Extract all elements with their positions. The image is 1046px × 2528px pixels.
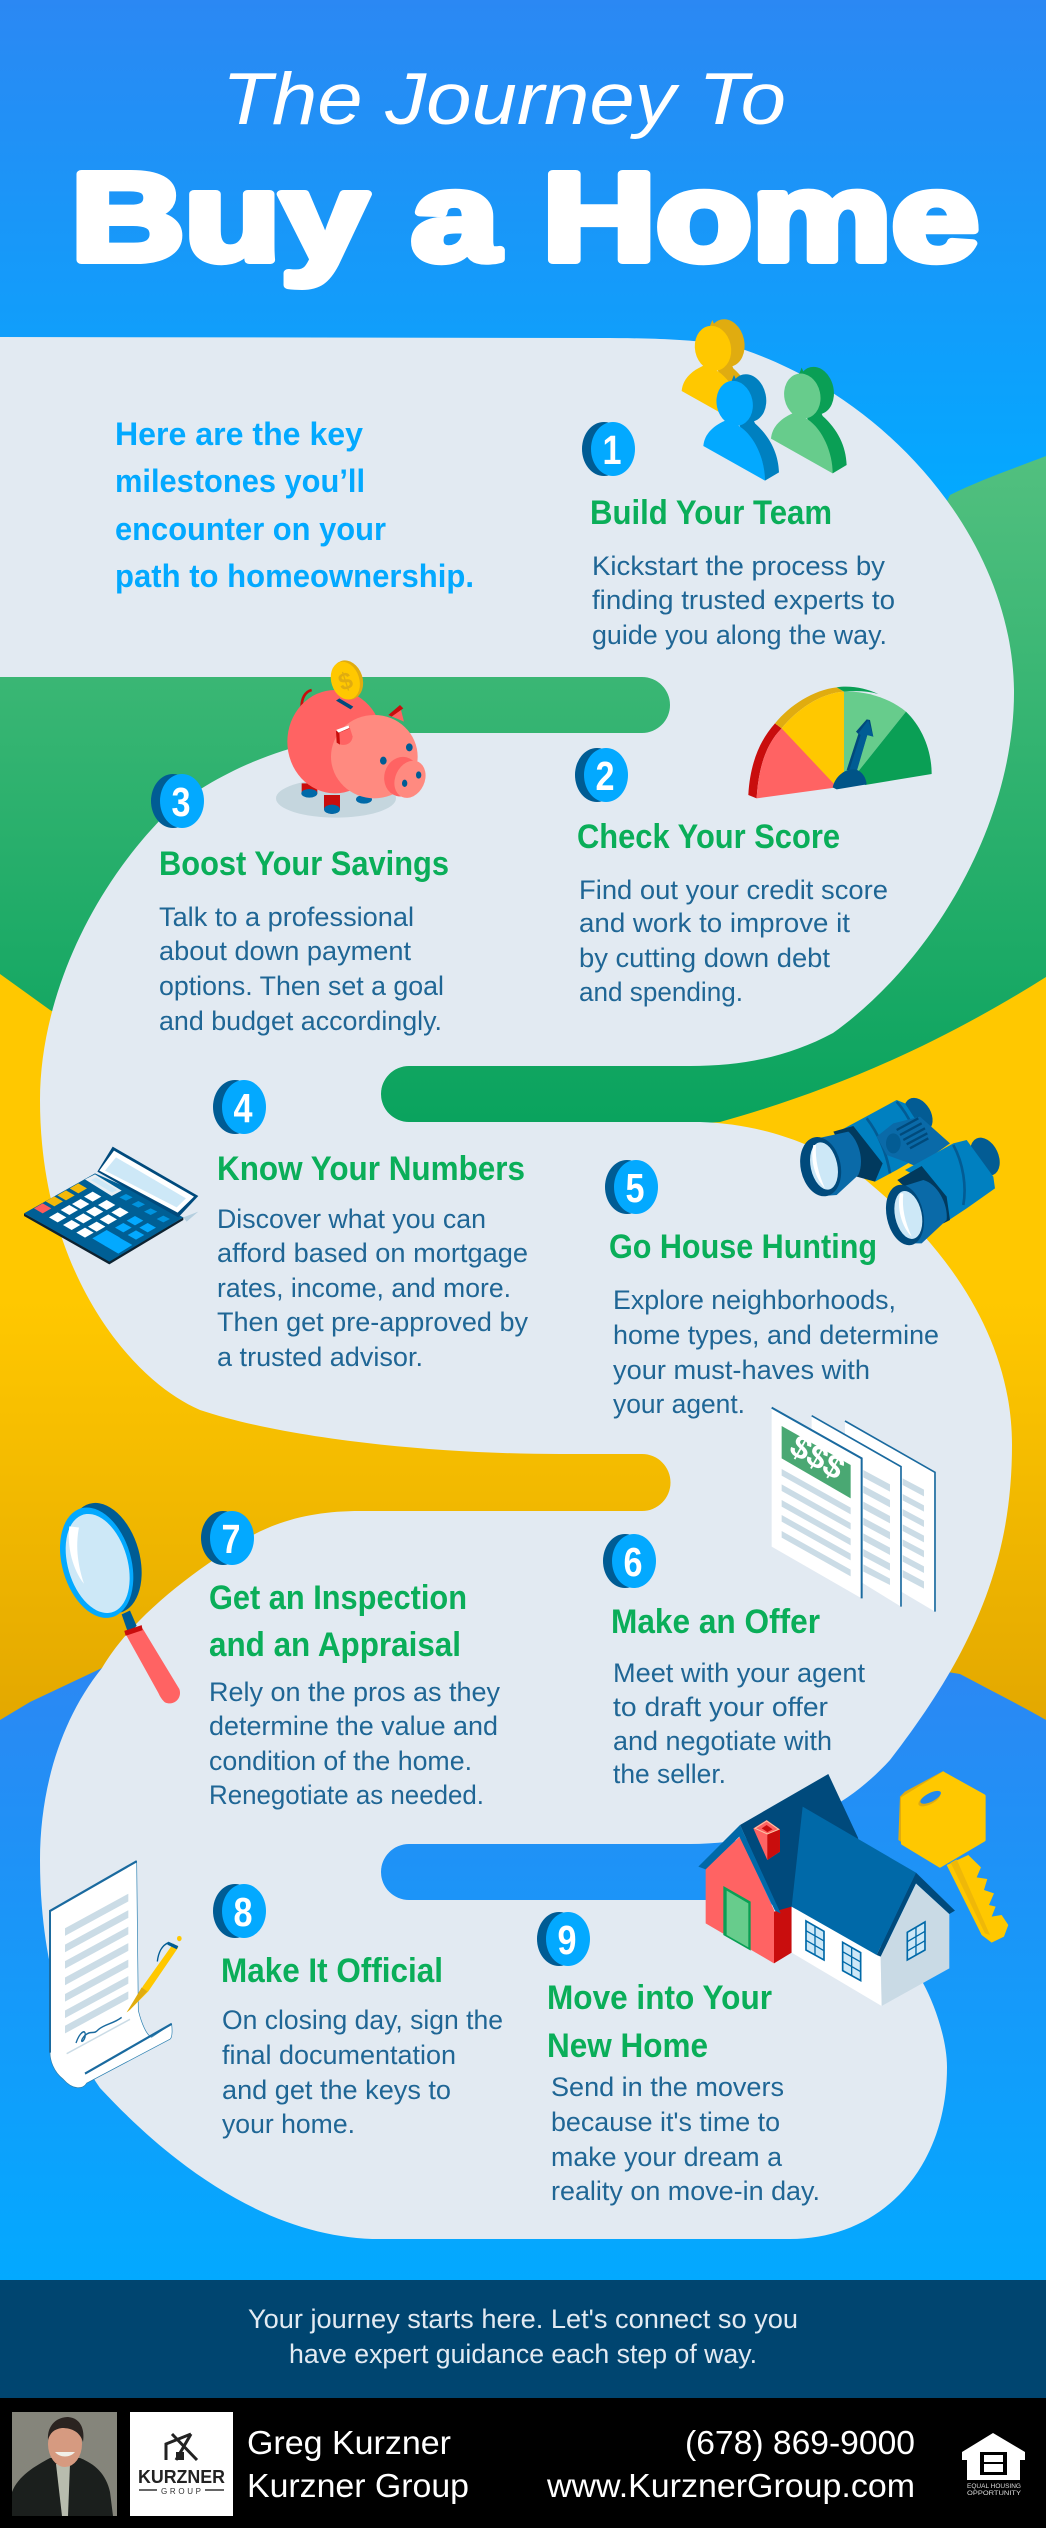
call to action band: Your journey starts here. Let's connect so you (248, 2304, 798, 2334)
heading 8: Make It Official (221, 1952, 443, 1990)
call to action band: have expert guidance each step of way. (289, 2339, 757, 2369)
body 9: Send in the movers (551, 2072, 784, 2102)
badge 7 (201, 1511, 254, 1565)
body 3: about down payment (159, 936, 411, 966)
step 9: move into your new home (537, 1912, 820, 2206)
icon: team of people (682, 316, 847, 481)
body 5: Explore neighborhoods, (613, 1285, 896, 1315)
company logo: KURZNER (138, 2467, 225, 2487)
icon: calculator (24, 1147, 198, 1264)
badge 8: 8 (234, 1889, 252, 1935)
background: yellow band (0, 974, 1046, 1800)
body 7 (209, 1677, 500, 1810)
body 4 (217, 1204, 528, 1372)
step 1: build your team (582, 422, 895, 650)
step 2: check your score (575, 748, 888, 1007)
agent photo (12, 2412, 117, 2516)
heading 9: New Home (547, 2027, 708, 2065)
background: lower blue band (0, 1600, 1046, 2282)
agent name: Greg Kurzner (247, 2424, 451, 2461)
icon: equal housing opportunity: EQUAL HOUSING (967, 2483, 1021, 2490)
body 8: and get the keys to (222, 2075, 451, 2105)
body 3: and budget accordingly. (159, 1006, 442, 1036)
body 5: your must-haves with (613, 1355, 870, 1385)
body 8 (222, 2005, 503, 2139)
call to action band (0, 2280, 1046, 2399)
badge 2: 2 (596, 753, 614, 799)
body 6: the seller. (613, 1759, 726, 1789)
step 4: know your numbers (213, 1080, 528, 1372)
heading 3: Boost Your Savings (159, 845, 449, 883)
house (698, 1774, 955, 2006)
phone and website: (678) 869-9000 (685, 2424, 915, 2461)
badge 3 (151, 774, 204, 828)
body 9: reality on move-in day. (551, 2176, 820, 2206)
step 7: get an inspection and an appraisal (201, 1511, 500, 1810)
body 6: to draft your offer (613, 1692, 828, 1722)
heading 7 (209, 1579, 467, 1664)
icon: piggy bank (276, 656, 431, 818)
icon: credit score gauge (748, 687, 932, 798)
heading 1: Build Your Team (590, 494, 832, 532)
body 2: and work to improve it (579, 908, 851, 938)
step 6: make an offer (603, 1534, 865, 1789)
icon: equal housing opportunity: OPPORTUNITY (967, 2490, 1022, 2497)
heading 6: Make an Offer (611, 1603, 820, 1641)
body 9 (551, 2072, 820, 2206)
badge 3: 3 (172, 779, 190, 825)
body 9: because it's time to (551, 2107, 780, 2137)
icon: magnifying glass (46, 1490, 180, 1703)
body 2: by cutting down debt (579, 943, 831, 973)
heading 2: Check Your Score (577, 818, 840, 856)
badge 9 (537, 1912, 590, 1966)
body 6 (613, 1658, 865, 1789)
key (898, 1771, 1008, 1943)
badge 9: 9 (558, 1917, 576, 1963)
body 6: and negotiate with (613, 1726, 832, 1756)
body 2: and spending. (579, 977, 743, 1007)
phone and website: www.KurznerGroup.com (546, 2467, 915, 2504)
body 6: Meet with your agent (613, 1658, 865, 1688)
body 1: finding trusted experts to (592, 585, 895, 615)
body 8: On closing day, sign the (222, 2005, 503, 2035)
background: top blue band (0, 0, 1046, 1000)
body 5: your agent. (613, 1389, 745, 1419)
title (71, 59, 979, 287)
badge 5: 5 (626, 1165, 644, 1211)
badge 1 (582, 422, 635, 476)
icon: binoculars (795, 1093, 1006, 1249)
body 3 (159, 902, 444, 1036)
body 2 (579, 875, 888, 1007)
heading 4: Know Your Numbers (217, 1150, 525, 1188)
body 7: determine the value and (209, 1711, 498, 1741)
icon: offer documents (772, 1408, 935, 1612)
title: The Journey To (222, 59, 786, 140)
body 4: afford based on mortgage (217, 1238, 528, 1268)
icon: offer documents: $$$ (784, 1427, 851, 1487)
body 7: condition of the home. (209, 1746, 472, 1776)
body 8: your home. (222, 2109, 355, 2139)
company logo (130, 2412, 233, 2516)
icon: piggy bank: $ (335, 667, 356, 697)
body 3: options. Then set a goal (159, 971, 444, 1001)
intro text (115, 416, 474, 594)
badge 8 (213, 1884, 266, 1938)
agent name (247, 2424, 469, 2504)
company logo: GROUP (161, 2487, 201, 2496)
intro text: encounter on your (115, 511, 386, 547)
intro text: milestones you’ll (115, 463, 365, 499)
body 7: Rely on the pros as they (209, 1677, 500, 1707)
body 1: Kickstart the process by (592, 551, 885, 581)
body 4: Discover what you can (217, 1204, 486, 1234)
intro text: path to homeownership. (115, 558, 474, 594)
body 2: Find out your credit score (579, 875, 888, 905)
body 4: Then get pre-approved by (217, 1307, 528, 1337)
badge 5 (605, 1160, 658, 1214)
badge 6 (603, 1534, 656, 1588)
body 1: guide you along the way. (592, 620, 887, 650)
icon: house and key (698, 1771, 1008, 2006)
body 5 (613, 1285, 939, 1419)
heading 5: Go House Hunting (609, 1228, 877, 1266)
body 4: a trusted advisor. (217, 1342, 423, 1372)
body 5: home types, and determine (613, 1320, 939, 1350)
badge 4: 4 (234, 1085, 253, 1131)
background: green band (0, 456, 1046, 1200)
intro text: Here are the key (115, 416, 363, 452)
body 9: make your dream a (551, 2142, 783, 2172)
step 5: go house hunting (605, 1160, 939, 1419)
heading 7: and an Appraisal (209, 1626, 461, 1664)
agent name: Kurzner Group (247, 2467, 469, 2504)
heading 9 (547, 1979, 772, 2065)
contact footer (0, 2398, 1046, 2528)
icon: signed contract and pen (50, 1861, 182, 2088)
step 8: make it official (213, 1884, 503, 2139)
body 1 (592, 551, 895, 650)
title: Buy a Home (71, 148, 979, 287)
body 4: rates, income, and more. (217, 1273, 511, 1303)
badge 6: 6 (624, 1539, 642, 1585)
badge 2 (575, 748, 628, 802)
step 3: boost your savings (151, 774, 449, 1036)
badge 1: 1 (602, 427, 622, 473)
heading 9: Move into Your (547, 1979, 772, 2017)
badge 4 (213, 1080, 266, 1134)
body 8: final documentation (222, 2040, 456, 2070)
badge 7: 7 (222, 1516, 240, 1562)
body 3: Talk to a professional (159, 902, 414, 932)
icon: equal housing opportunity (962, 2433, 1025, 2497)
phone and website (546, 2424, 915, 2504)
body 7: Renegotiate as needed. (209, 1780, 484, 1810)
heading 7: Get an Inspection (209, 1579, 467, 1617)
winding light path (0, 337, 1014, 2239)
